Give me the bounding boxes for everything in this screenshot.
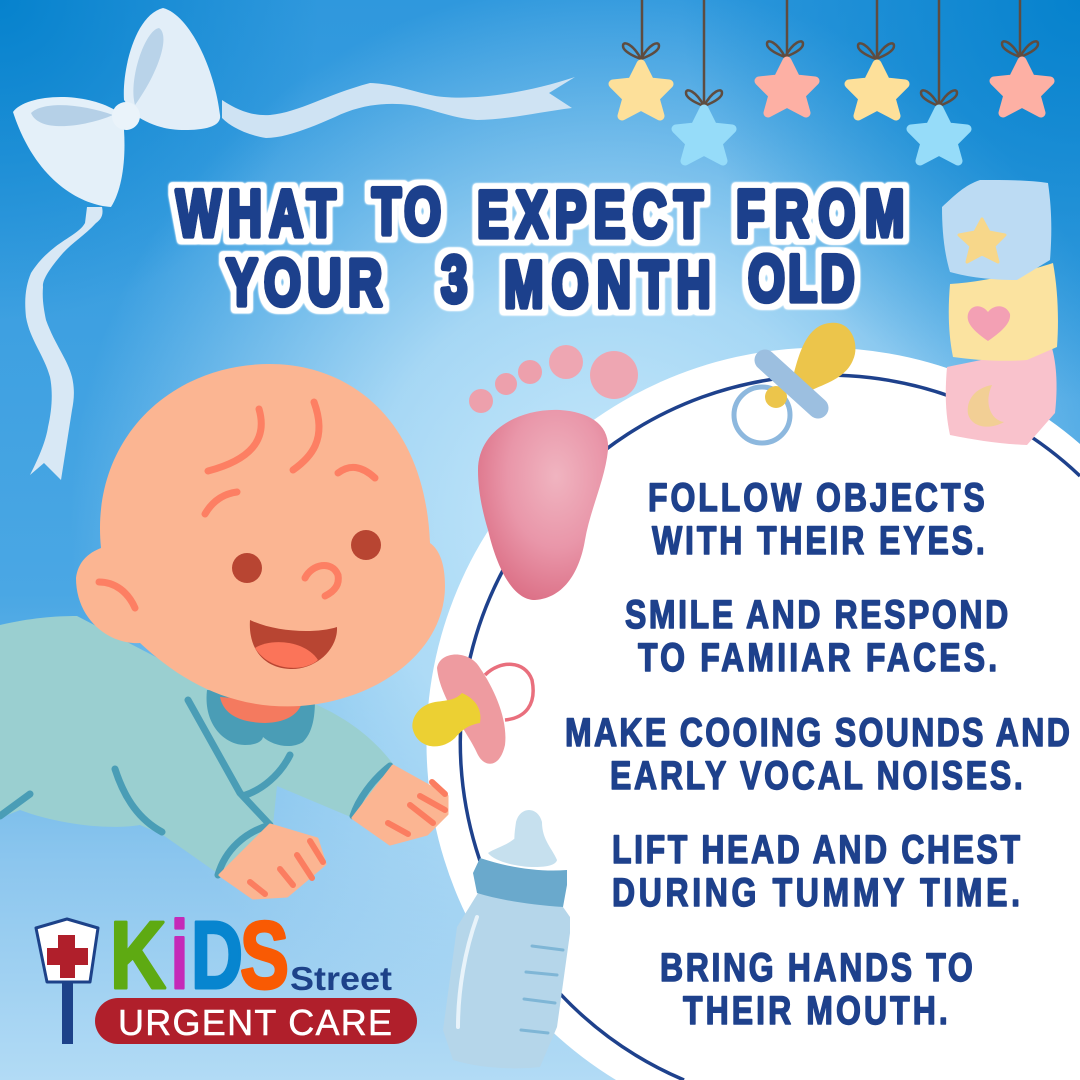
logo wordmark: [110, 902, 289, 1009]
hanging star mobile: [613, 0, 1050, 161]
milestones list: WITH THEIR EYES.: [652, 518, 985, 563]
baby body: [0, 616, 393, 875]
title: 3: [441, 243, 467, 317]
icon: stacked toy blocks: [942, 180, 1058, 445]
logo urgent care pill: URGENT CARE: [118, 1002, 392, 1043]
title: WHAT: [176, 177, 336, 251]
logo wordmark: D: [191, 902, 243, 1009]
icon: blue pacifier: [734, 323, 855, 443]
milestones list: SMILE AND RESPOND: [625, 592, 1008, 637]
milestones list: LIFT HEAD AND CHEST: [612, 827, 1020, 872]
logo wordmark: K: [110, 902, 166, 1009]
title: YOUR: [226, 246, 382, 320]
title: MONTH: [504, 248, 711, 322]
milestones list: EARLY VOCAL NOISES.: [610, 753, 1023, 798]
baby head: [76, 364, 445, 706]
milestones list: THEIR MOUTH.: [683, 988, 948, 1033]
illustration: baby: [0, 364, 447, 898]
baby hands: [220, 766, 447, 898]
panel ring: [460, 375, 1080, 1080]
baby face: [99, 402, 381, 669]
icon: baby bottle: [443, 810, 570, 1068]
milestones list: BRING HANDS TO: [660, 945, 973, 990]
milestones list: [565, 475, 1070, 1033]
title: OLD: [748, 242, 855, 316]
logo wordmark: S: [240, 902, 289, 1009]
logo lamp: [36, 919, 98, 1044]
logo: Kids Street Urgent Care: [36, 902, 417, 1044]
title: [176, 175, 904, 322]
title: EXPECT: [477, 178, 703, 252]
milestones list: DURING TUMMY TIME.: [612, 870, 1020, 915]
milestones list: FOLLOW OBJECTS: [648, 475, 985, 520]
icon: white bow with ribbon: [13, 8, 575, 480]
milestones list: TO FAMIIAR FACES.: [638, 635, 997, 680]
title: TO: [372, 175, 441, 249]
panel: white circle: [426, 348, 1080, 1080]
logo wordmark: i: [171, 902, 188, 1009]
icon: pink pacifier: [412, 654, 533, 764]
milestones list: MAKE COOING SOUNDS AND: [565, 710, 1070, 755]
title: FROM: [736, 177, 904, 251]
logo street label: Street: [290, 960, 392, 997]
icon: pink footprint: [469, 345, 638, 600]
